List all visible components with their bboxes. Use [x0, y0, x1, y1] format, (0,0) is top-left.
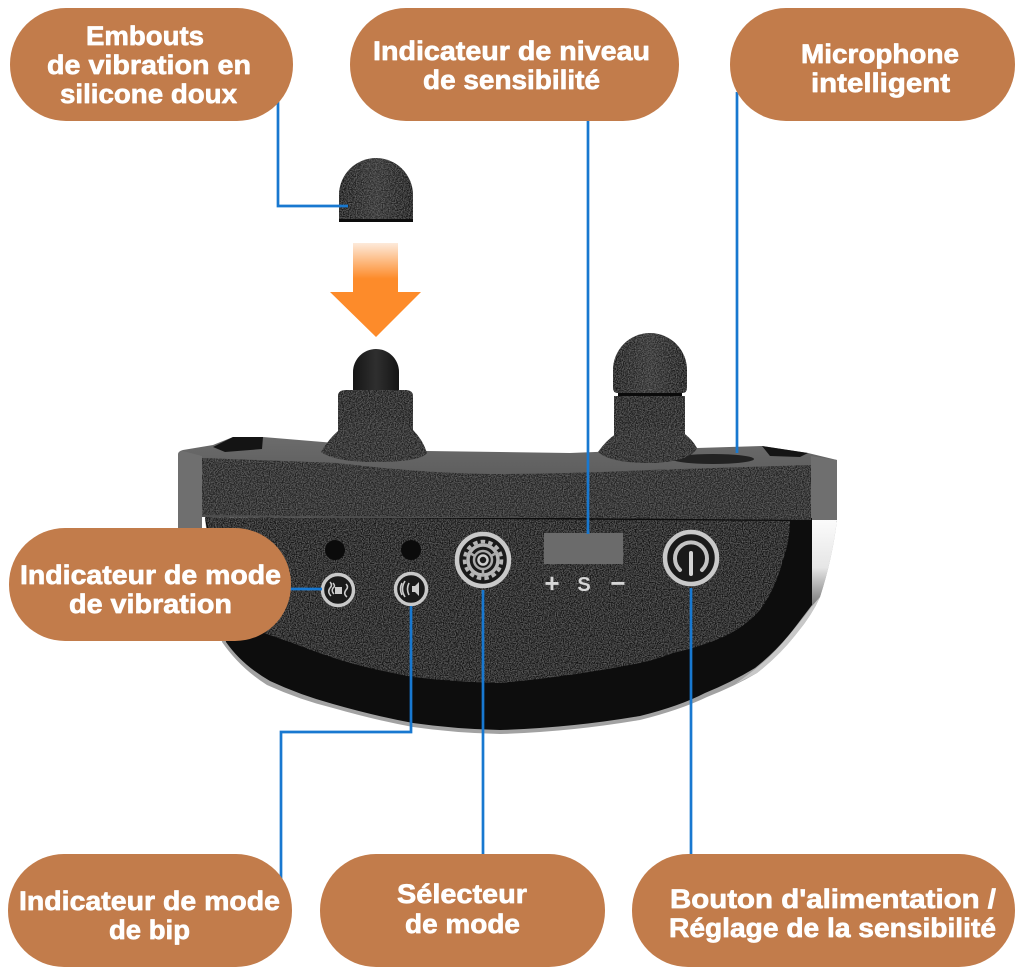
- left post tip and collar: [338, 349, 413, 440]
- callout: mode selector: de mode: [405, 909, 520, 939]
- right post with fitted tip: [613, 333, 687, 440]
- callout: smart microphone: Microphone: [801, 39, 959, 69]
- callout: smart microphone: intelligent: [811, 68, 950, 98]
- callout: sensitivity level indicator: [350, 8, 679, 121]
- leader line: mode selector: [482, 590, 484, 856]
- silver corner highlight: [812, 520, 837, 606]
- callout: sensitivity level indicator: de sensibilité: [423, 65, 600, 95]
- leader line: beep mode: [281, 606, 411, 882]
- black lower band: [205, 518, 812, 730]
- plus S minus labels: −: [610, 568, 626, 598]
- callout: beep mode indicator: de bip: [109, 915, 190, 945]
- arrow: tip goes onto the post: [330, 243, 421, 337]
- leader line: sensitivity indicator: [587, 120, 589, 534]
- callout: beep mode indicator: [8, 854, 292, 967]
- callout: mode selector: [320, 854, 605, 967]
- callout: vibration mode indicator: de vibration: [69, 589, 232, 619]
- front top band: [202, 458, 811, 520]
- device: collar receiver: [178, 333, 837, 734]
- callout: smart microphone: [730, 8, 1015, 121]
- LED holes: [325, 540, 421, 560]
- icon: power button: [665, 532, 717, 584]
- callout: vibration mode indicator: [9, 528, 291, 641]
- left post bell: [321, 417, 427, 462]
- icon: vibration button: [322, 574, 354, 606]
- plus S minus labels: S: [577, 574, 591, 596]
- silver curved highlight: [735, 597, 820, 684]
- icon: beep button: [396, 574, 426, 604]
- top recess slots: [213, 437, 808, 457]
- callout: vibration mode indicator: Indicateur de mode: [20, 560, 281, 590]
- leader line: silicone tip: [278, 100, 348, 206]
- microphone port: [672, 454, 754, 464]
- callout: beep mode indicator: Indicateur de mode: [19, 886, 280, 916]
- callout: sensitivity level indicator: Indicateur de niveau: [373, 36, 650, 66]
- callout: power and sensitivity setting: Bouton d'alimentation /: [670, 884, 997, 914]
- callout: power and sensitivity setting: [632, 854, 1015, 967]
- callout: silicone tips: [10, 8, 293, 121]
- callout: mode selector: Sélecteur: [397, 879, 528, 909]
- casing top face and grey sides: [178, 437, 837, 530]
- leader line: vibration mode: [288, 588, 322, 590]
- callout: silicone tips: silicone doux: [60, 79, 237, 109]
- leader line: microphone: [736, 92, 738, 453]
- icon: mode selector gear button: [457, 534, 509, 586]
- left and right grey side faces: [178, 451, 837, 530]
- silver rim: [205, 520, 837, 734]
- icon: detached silicone tip: [339, 158, 413, 222]
- callout: power and sensitivity setting: Réglage de la sensibilité: [669, 913, 996, 943]
- plus S minus labels: +: [544, 568, 560, 598]
- callout: silicone tips: de vibration en: [47, 50, 251, 80]
- leader line: power button: [690, 588, 692, 856]
- callout: silicone tips: Embouts: [86, 21, 204, 51]
- plus S minus labels: [544, 568, 626, 598]
- textured control panel: [205, 517, 790, 683]
- LCD sensitivity display: [544, 533, 623, 564]
- right post bell: [598, 427, 697, 463]
